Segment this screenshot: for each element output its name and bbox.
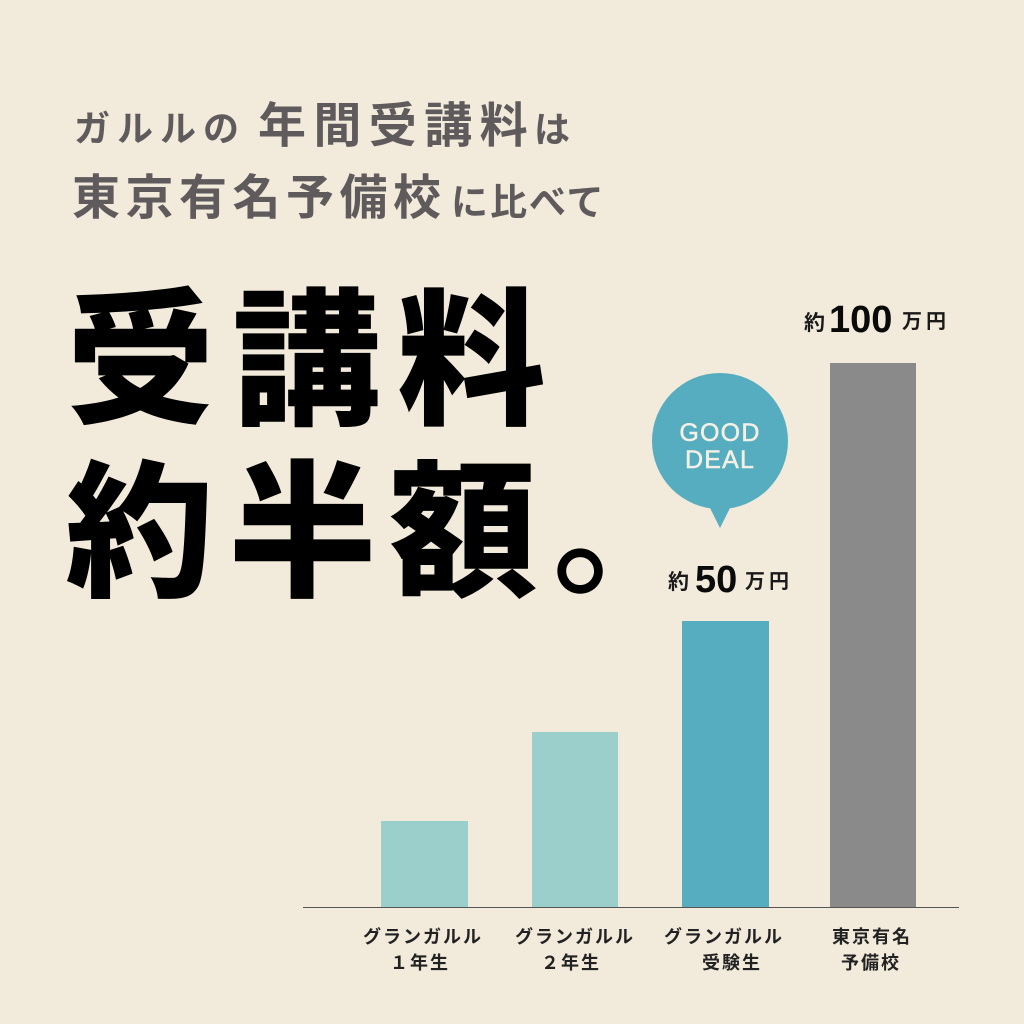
category label 4: 予備校 <box>841 953 901 973</box>
value label 50 <box>668 559 793 601</box>
category label 3: 受験生 <box>702 953 762 973</box>
category label 4: 東京有名 <box>832 927 912 947</box>
callout: good deal: GOOD <box>679 419 761 447</box>
subtitle line 2: に比べて <box>451 182 606 223</box>
value label 100: 万円 <box>902 311 950 333</box>
bar: 2nd year <box>532 732 618 907</box>
headline line 1: 料 <box>398 280 546 445</box>
value label 100 <box>804 299 950 341</box>
headline line 2: 約 <box>66 452 214 617</box>
category label 2 <box>515 927 635 973</box>
subtitle line 1: ガルルの <box>74 108 246 149</box>
subtitle line 1: は <box>534 109 570 150</box>
text: 。 <box>552 453 697 615</box>
value label 100: 100 <box>829 299 892 341</box>
category label 4 <box>832 927 912 973</box>
value label 100: 約 <box>804 312 825 335</box>
category label 1: １年生 <box>390 953 450 973</box>
headline line 2: 半 <box>228 452 376 617</box>
callout: good deal: DEAL <box>685 446 755 474</box>
category label 2: ２年生 <box>541 953 601 973</box>
bar: 1st year <box>381 821 468 907</box>
headline line 1 <box>66 280 546 445</box>
headline line 1: 講 <box>232 280 380 445</box>
subtitle line 1: 年間受講料 <box>258 100 535 153</box>
headline line 2: 額 <box>389 452 537 617</box>
subtitle line 2: 東京有名予備校 <box>72 172 447 225</box>
callout: good deal <box>652 373 788 528</box>
axis line <box>303 907 959 908</box>
bar chart <box>303 299 959 973</box>
value label 50: 約 <box>668 571 689 594</box>
category label 1 <box>363 927 483 973</box>
bar: exam year <box>682 621 769 907</box>
category label 2: グランガルル <box>515 927 635 947</box>
category label 1: グランガルル <box>363 927 483 947</box>
value label 50: 50 <box>695 559 737 601</box>
category label 3 <box>664 927 784 973</box>
headline line 2 <box>66 452 697 617</box>
bar: Tokyo prep school <box>830 363 916 907</box>
subtitle line 1 <box>74 100 570 153</box>
value label 50: 万円 <box>745 571 793 593</box>
headline line 1: 受 <box>66 280 214 445</box>
category label 3: グランガルル <box>664 927 784 947</box>
